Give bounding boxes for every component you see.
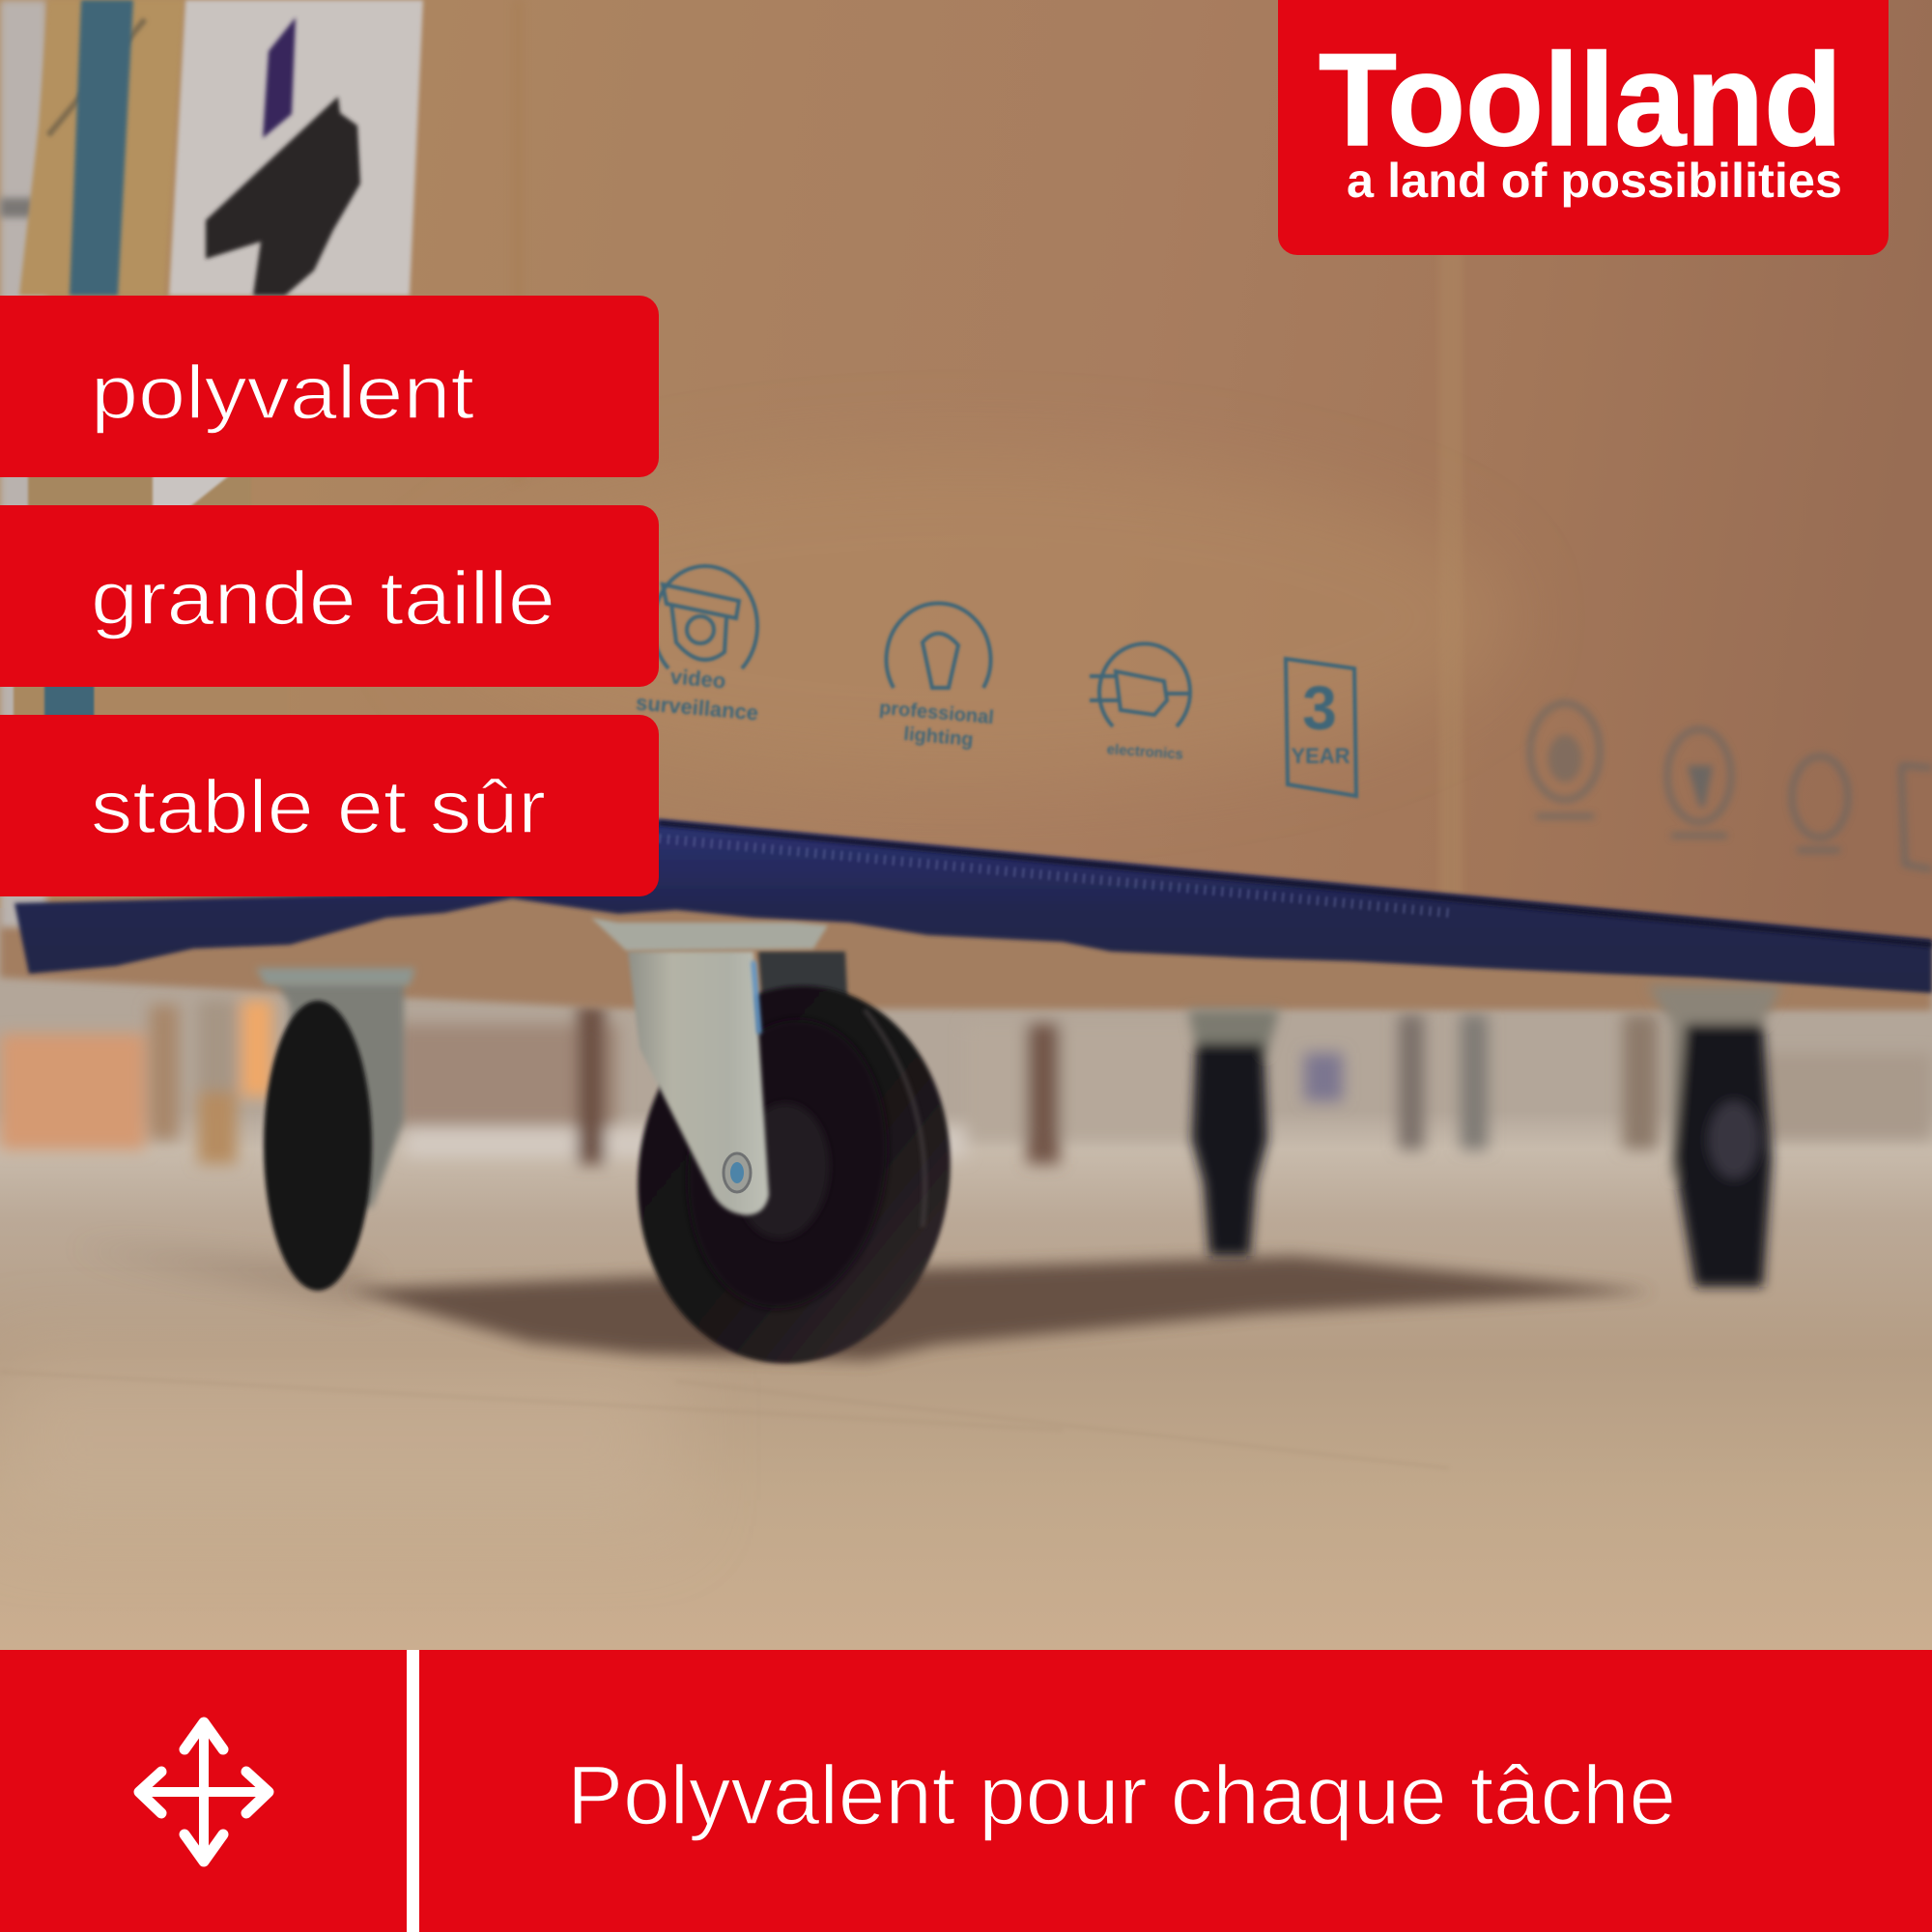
mounting plate <box>591 918 828 951</box>
second box at back left <box>0 0 423 927</box>
rear right wheel <box>1647 985 1782 1287</box>
icon: video surveillance: surveillance <box>635 691 759 725</box>
icon: video surveillance <box>635 566 759 725</box>
feature tag: grande taille <box>0 505 659 687</box>
platform underside <box>0 869 1932 1010</box>
floor <box>0 1111 1932 1652</box>
feature tag: stable et sûr: stable et sûr <box>91 764 546 849</box>
blurred warehouse posts and lights <box>0 1000 1932 1164</box>
icon: professional lighting <box>878 604 995 751</box>
icon: professional lighting: lighting <box>903 724 974 751</box>
tyre <box>613 966 975 1383</box>
icon: professional lighting: professional <box>878 697 995 728</box>
purple tag <box>263 17 296 138</box>
feature tag: polyvalent: polyvalent <box>91 350 474 435</box>
feature tag: grande taille: grande taille <box>91 555 555 640</box>
icon: 3 year warranty: 3 <box>1302 673 1337 743</box>
icon: four-way arrows <box>139 1722 269 1861</box>
icon: electronics plug <box>1090 643 1190 763</box>
feature tag: stable et sûr <box>0 715 659 896</box>
faded icons on the next box <box>1530 703 1932 869</box>
fabric strap around the platform <box>14 819 1932 993</box>
divider <box>407 1650 419 1932</box>
front caster wheel <box>591 918 975 1383</box>
icon: electronics plug: electronics <box>1106 741 1183 763</box>
warehouse wall <box>0 869 1932 1179</box>
cardboard box <box>0 0 1932 942</box>
logo panel <box>1278 0 1889 255</box>
logo wordmark: Toolland <box>1319 26 1842 173</box>
left rear wheel <box>256 968 415 1291</box>
icon: 3 year warranty <box>1286 659 1356 796</box>
lower box band <box>28 473 251 512</box>
banner headline: Polyvalent pour chaque tâche <box>567 1749 1676 1842</box>
logo tagline: a land of possibilities <box>1347 154 1842 208</box>
bottom banner <box>0 1650 1932 1932</box>
floor shadow <box>68 1246 1654 1360</box>
printed icons on the box <box>635 566 1356 796</box>
teal stripe <box>70 0 133 296</box>
axle bolt <box>724 1153 751 1192</box>
icon: video surveillance: video <box>669 665 726 693</box>
steel bracket <box>628 952 769 1215</box>
rear middle wheel <box>1188 1009 1280 1256</box>
white label <box>169 0 423 296</box>
feature tag: polyvalent <box>0 296 659 477</box>
icon: 3 year warranty: YEAR <box>1291 744 1350 768</box>
black logo mark <box>206 97 360 296</box>
